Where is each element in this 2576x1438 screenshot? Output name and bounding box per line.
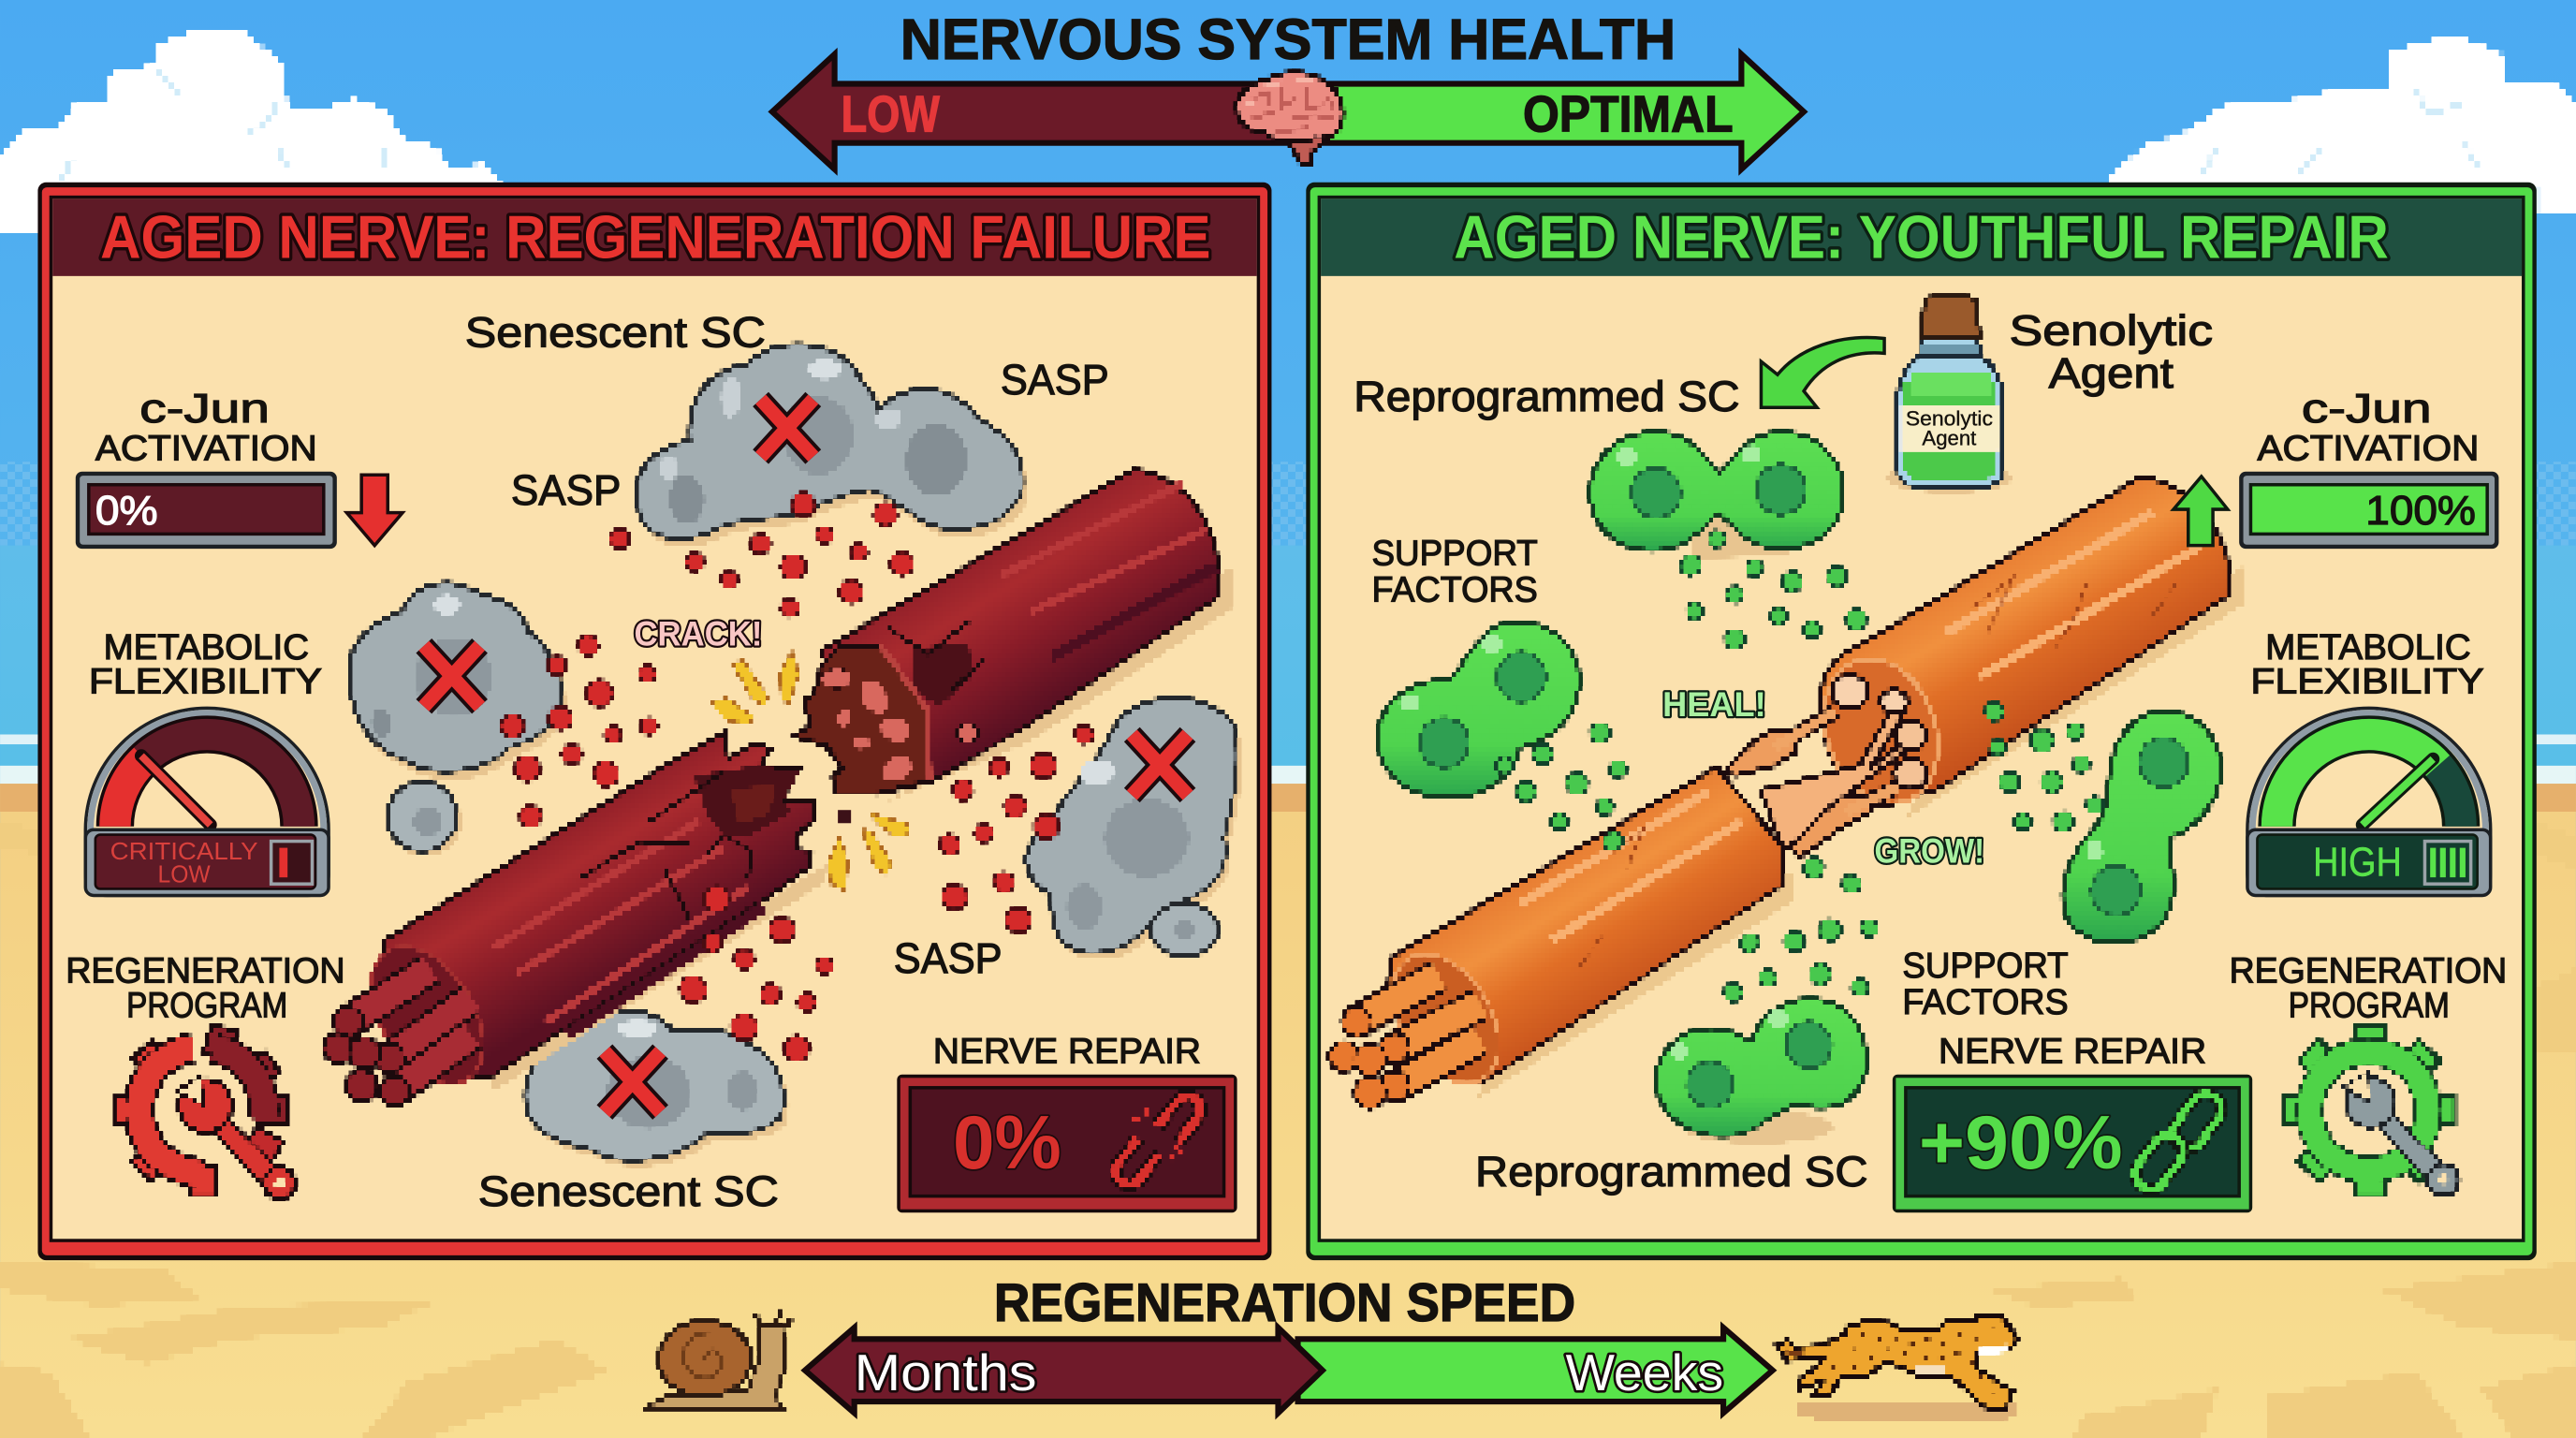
icon: chain link bbox=[2130, 1088, 2227, 1196]
nerve: damaged and severed bbox=[324, 470, 1232, 1106]
labels: senescent cells and SASP bbox=[465, 308, 1109, 1215]
arrow: low bbox=[772, 54, 1298, 169]
label: METABOLIC bbox=[104, 627, 309, 667]
metric: metabolic flexibility bbox=[85, 627, 329, 895]
icon: sparks bbox=[711, 653, 909, 890]
metric: regeneration program bbox=[66, 951, 345, 1198]
nerve lower segment bbox=[1329, 768, 1794, 1108]
label: Reprogrammed SC bbox=[1354, 373, 1740, 420]
gauge: CRITICALLY bbox=[110, 839, 258, 865]
icon: cheetah bbox=[1776, 1314, 2017, 1421]
label: ACTIVATION bbox=[2257, 428, 2479, 467]
metric: nerve repair +90% bbox=[1893, 1032, 2252, 1212]
cell: left reprogrammed bbox=[1379, 622, 1579, 798]
metric: metabolic flexibility bbox=[2247, 627, 2491, 895]
icon: x mark bbox=[761, 399, 813, 457]
progress bar bbox=[76, 472, 337, 549]
progress bar: 0% bbox=[95, 488, 158, 534]
regeneration speed footer bbox=[644, 1273, 2017, 1421]
icon: senolytic agent bottle bbox=[1888, 295, 2012, 493]
label: REGENERATION bbox=[2230, 951, 2507, 990]
arrow: months bbox=[805, 1328, 1323, 1413]
gauge bbox=[2247, 708, 2491, 895]
metric: c-Jun activation bbox=[2239, 386, 2498, 549]
label: FACTORS bbox=[1372, 569, 1538, 609]
label: FLEXIBILITY bbox=[2250, 662, 2484, 701]
nerve: regrowing and reconnected bbox=[1329, 477, 2243, 1108]
label: crack: CRACK! bbox=[634, 615, 762, 653]
cell: left senescent bbox=[349, 583, 565, 780]
nerve lower segment bbox=[324, 733, 829, 1106]
label: SASP bbox=[511, 466, 621, 514]
cell: bottom senescent bbox=[525, 1010, 788, 1167]
metric: regeneration program bbox=[2230, 951, 2507, 1196]
label: heal: HEAL! bbox=[1662, 685, 1766, 724]
metric: c-Jun activation bbox=[76, 386, 402, 549]
label: Reprogrammed SC bbox=[1475, 1148, 1868, 1196]
metric: nerve repair 0% bbox=[897, 1032, 1237, 1212]
label: months: Months bbox=[855, 1344, 1036, 1401]
value box bbox=[897, 1075, 1237, 1212]
label: SASP bbox=[1001, 356, 1109, 404]
cell: small fragment left bbox=[388, 782, 461, 856]
progress bar bbox=[2239, 472, 2498, 549]
label: SUPPORT bbox=[1372, 534, 1538, 573]
label: PROGRAM bbox=[2289, 985, 2450, 1024]
cell: small fragment right bbox=[1151, 903, 1218, 956]
cell: top reprogrammed bbox=[1590, 433, 1843, 559]
gauge: LOW bbox=[158, 861, 211, 888]
cell: right reprogrammed bbox=[2063, 712, 2221, 943]
labels: cells and factors bbox=[1354, 307, 2213, 1196]
arrow: curved green bbox=[1761, 338, 1884, 407]
label: METABOLIC bbox=[2265, 627, 2471, 667]
nerve regrowing strands bbox=[1725, 675, 1927, 858]
label: SUPPORT bbox=[1902, 946, 2069, 985]
gauge bbox=[85, 708, 329, 895]
cloud left bbox=[0, 28, 505, 231]
arrow: up bbox=[2174, 477, 2228, 546]
label: NERVE REPAIR bbox=[1939, 1032, 2206, 1071]
label: Senescent SC bbox=[465, 308, 766, 356]
label: Agent bbox=[2049, 349, 2174, 397]
panel: aged nerve youthful repair bbox=[1306, 183, 2537, 1260]
bottle label: Agent bbox=[1922, 427, 1976, 450]
cell: bottom reprogrammed bbox=[1656, 999, 1866, 1143]
arrow: optimal bbox=[1298, 54, 1804, 169]
icon: debris bbox=[838, 810, 851, 823]
heading: REGENERATION SPEED bbox=[994, 1273, 1575, 1333]
label: c-Jun bbox=[2302, 386, 2431, 432]
particles: support factor dots bbox=[1497, 531, 2102, 1002]
heading: AGED NERVE: YOUTHFUL REPAIR bbox=[1454, 203, 2389, 271]
value box: +90% bbox=[1919, 1101, 2123, 1185]
label: PROGRAM bbox=[126, 985, 287, 1024]
label: ACTIVATION bbox=[95, 428, 317, 467]
bottle label: Senolytic bbox=[1906, 407, 1993, 431]
label: optimal: OPTIMAL bbox=[1523, 85, 1734, 142]
icon: broken gear and wrench bbox=[117, 1025, 295, 1198]
icon: snail bbox=[644, 1312, 792, 1408]
particles: SASP dots bbox=[501, 493, 1093, 1061]
gauge: HIGH bbox=[2313, 839, 2402, 885]
label: Senolytic bbox=[2009, 307, 2213, 355]
heading: AGED NERVE: REGENERATION FAILURE bbox=[100, 203, 1211, 271]
icon: gear and wrench bbox=[2284, 1025, 2458, 1196]
cell: right senescent bbox=[1027, 698, 1242, 960]
arrow: weeks bbox=[1298, 1328, 1773, 1413]
icon: x mark bbox=[424, 646, 480, 707]
label: FACTORS bbox=[1902, 982, 2069, 1021]
label: grow: GROW! bbox=[1875, 831, 1984, 870]
panel frame bbox=[37, 183, 1271, 1260]
label: weeks: Weeks bbox=[1566, 1344, 1723, 1401]
cloud right bbox=[2110, 35, 2576, 213]
label: NERVE REPAIR bbox=[933, 1032, 1201, 1071]
bottle drawing bbox=[1888, 295, 2012, 493]
nerve upper segment bbox=[1805, 477, 2243, 819]
label: c-Jun bbox=[139, 386, 270, 432]
arrow: down bbox=[346, 475, 402, 546]
progress bar: 100% bbox=[2365, 488, 2476, 534]
icon: x mark bbox=[605, 1051, 661, 1112]
icon: x mark bbox=[1132, 734, 1188, 795]
label: low: LOW bbox=[842, 85, 940, 142]
cells: senescent cells and SASP bbox=[349, 345, 1242, 1167]
cells: reprogrammed cells bbox=[1379, 433, 2221, 1143]
label: REGENERATION bbox=[66, 951, 345, 990]
health scale arrow bbox=[772, 54, 1804, 169]
label: FLEXIBILITY bbox=[89, 662, 322, 701]
panel: aged nerve regeneration failure bbox=[37, 183, 1271, 1260]
cell: top senescent cluster bbox=[637, 345, 1028, 547]
nerve upper segment bbox=[795, 470, 1232, 805]
icon: broken chain link bbox=[1111, 1091, 1206, 1190]
label: SASP bbox=[894, 934, 1003, 982]
icon: brain bbox=[1237, 72, 1342, 166]
value box: 0% bbox=[953, 1101, 1061, 1185]
label: Senescent SC bbox=[478, 1167, 779, 1215]
panel frame bbox=[1306, 183, 2537, 1260]
value box bbox=[1893, 1075, 2252, 1212]
title: NERVOUS SYSTEM HEALTH bbox=[900, 7, 1676, 72]
